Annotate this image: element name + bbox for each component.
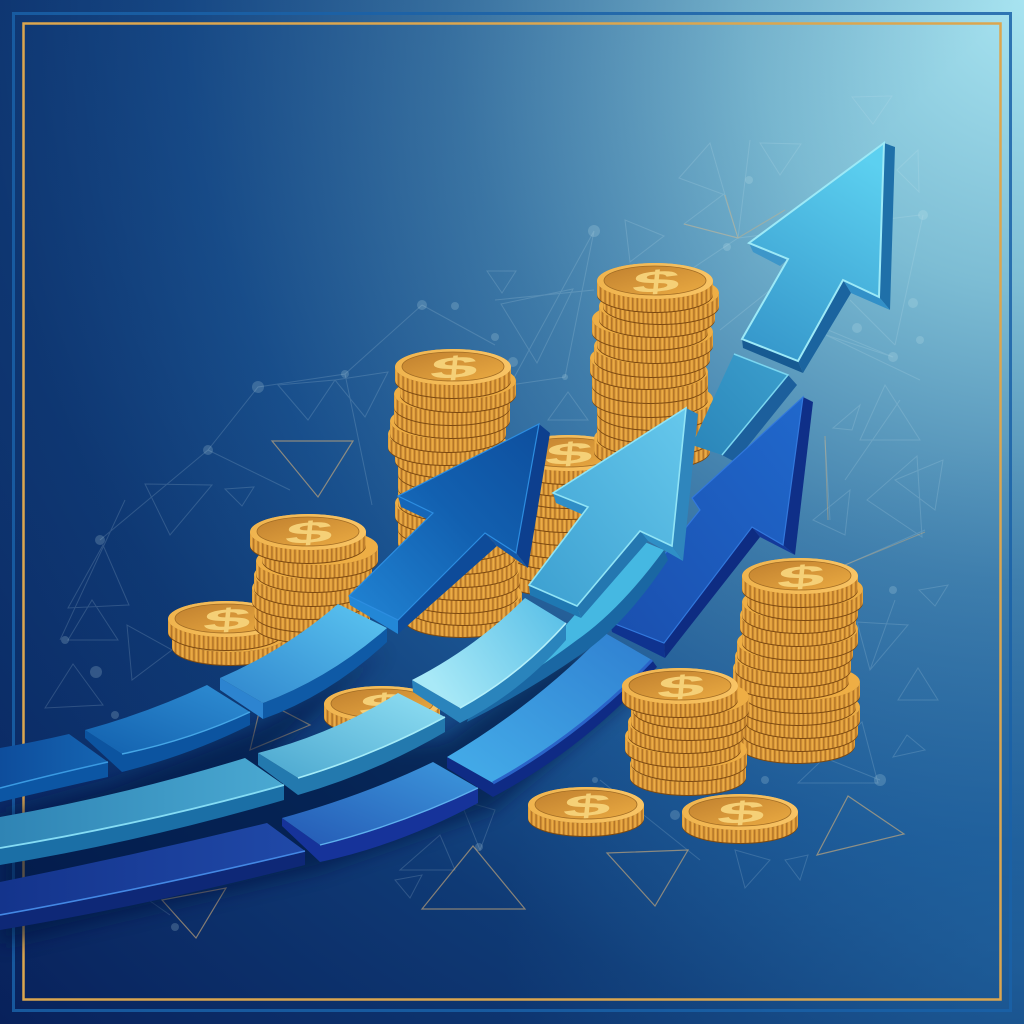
- coin stack: tallest: $: [631, 263, 682, 300]
- coin stack: centre left: [388, 349, 522, 638]
- coin: front left single: $: [562, 787, 613, 824]
- coin stack: middle behind arrows: $: [544, 435, 595, 472]
- arrow: dark blue right: [610, 397, 813, 658]
- coin stack: left: [250, 514, 378, 644]
- coin stack: front middle: $: [656, 668, 707, 705]
- coin stack: left: $: [284, 514, 335, 551]
- coin: half hidden behind middle band: [324, 686, 440, 736]
- arrow: dark blue left: [349, 424, 550, 634]
- band: middle row, three segments: [0, 540, 668, 865]
- coin: single behind left stack: $: [202, 601, 253, 638]
- coin stack: right: [733, 558, 863, 764]
- band: lower row, three segments: [0, 633, 657, 930]
- arrow: top light blue: [742, 143, 895, 373]
- coin: single behind left stack: [168, 601, 288, 666]
- band: upper row, three segments: [0, 604, 387, 802]
- decorative network of triangles and nodes: [45, 96, 948, 938]
- coin stack: centre left: $: [429, 349, 480, 386]
- coin stack: tallest: [590, 263, 719, 470]
- coin: front right single: [682, 794, 798, 844]
- band shadows: [0, 650, 650, 945]
- top band segment leading to light arrow: [692, 354, 797, 462]
- coin: front left single: [528, 787, 644, 837]
- coin: half hidden behind middle band: $: [358, 686, 409, 723]
- coin: front right single: $: [716, 794, 767, 831]
- arrow: light blue centre: [529, 408, 698, 618]
- coin stack: right: $: [776, 558, 827, 595]
- coin stack: front middle: [622, 668, 749, 796]
- coin stack: middle behind arrows: [502, 435, 626, 597]
